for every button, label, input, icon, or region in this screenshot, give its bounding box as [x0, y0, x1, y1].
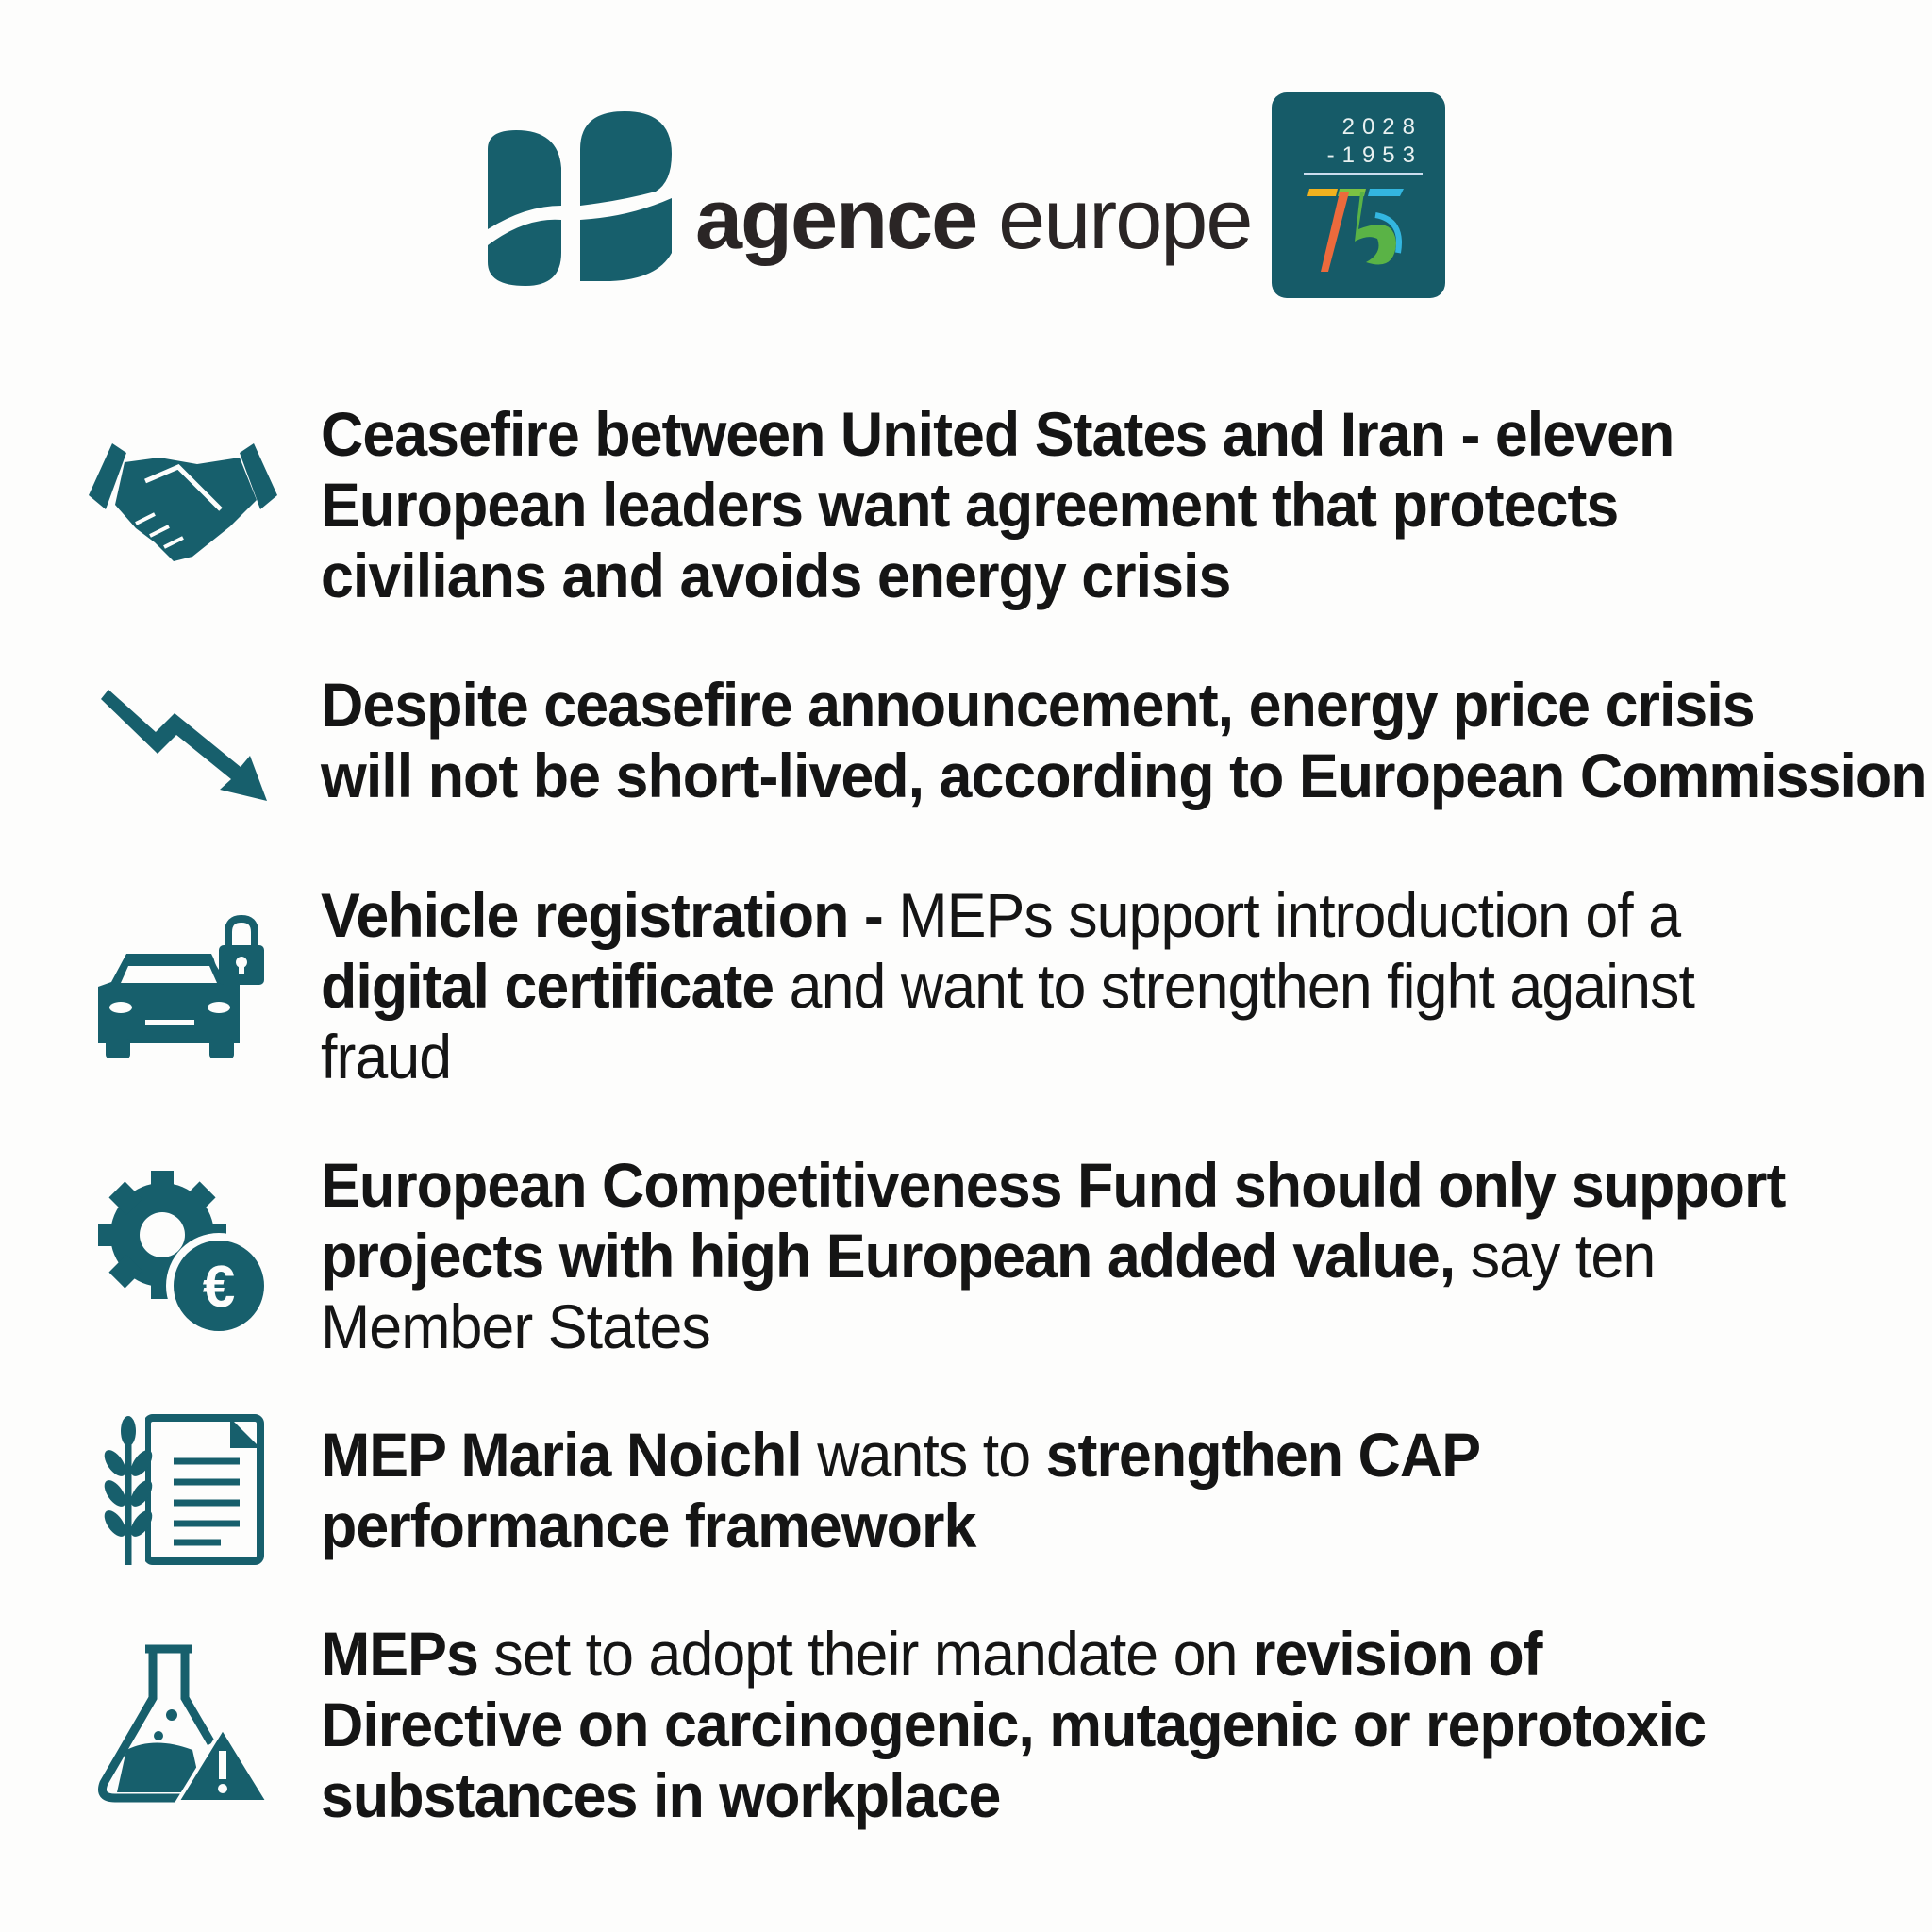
icon: car with lock — [98, 915, 264, 1058]
headline 1: civilians and avoids energy crisis — [321, 541, 1230, 610]
headline 1: European leaders want agreement that protects — [321, 470, 1618, 540]
anniversary badge 75: 2028 — [1342, 114, 1423, 140]
anniversary badge 75: -1953 — [1327, 142, 1423, 168]
headline 4: Member States — [321, 1291, 710, 1361]
headline 5: performance framework — [321, 1491, 975, 1560]
headline 4 — [321, 1150, 1786, 1361]
icon: handshake — [89, 443, 277, 561]
headline 1: Ceasefire between United States and Iran - eleven — [321, 399, 1674, 469]
headline 6: Directive on carcinogenic, mutagenic or reprotoxic — [321, 1690, 1706, 1759]
headline 2 — [321, 670, 1926, 810]
icon: down arrow — [101, 690, 267, 801]
headline 4: European Competitiveness Fund should only support — [321, 1150, 1785, 1220]
headline 3: Vehicle registration - MEPs support introduction of a — [321, 880, 1680, 950]
headline 6: MEPs set to adopt their mandate on revision of — [321, 1619, 1542, 1689]
logo wordmark: agence europe — [695, 173, 1251, 267]
icon: gear with euro coin — [98, 1171, 264, 1331]
headline 1 — [321, 399, 1674, 610]
headline 3: fraud — [321, 1022, 451, 1091]
logo: agence europe — [488, 92, 1445, 298]
icon: flask with warning — [98, 1645, 264, 1802]
headline 2: will not be short-lived, according to European Commission — [321, 741, 1926, 810]
headline 6 — [321, 1619, 1706, 1830]
anniversary badge 75 — [1272, 92, 1445, 298]
logo mark — [488, 111, 672, 286]
headline 3 — [321, 880, 1694, 1091]
headline 5 — [321, 1420, 1480, 1560]
headline 4: projects with high European added value, say ten — [321, 1221, 1655, 1291]
icon: gear with euro coin: € — [203, 1255, 235, 1320]
icon: wheat and document — [104, 1414, 264, 1565]
headline 3: digital certificate and want to strengthen fight against — [321, 951, 1694, 1021]
headline 2: Despite ceasefire announcement, energy price crisis — [321, 670, 1755, 740]
headline 6: substances in workplace — [321, 1760, 1000, 1830]
headline 5: MEP Maria Noichl wants to strengthen CAP — [321, 1420, 1480, 1490]
